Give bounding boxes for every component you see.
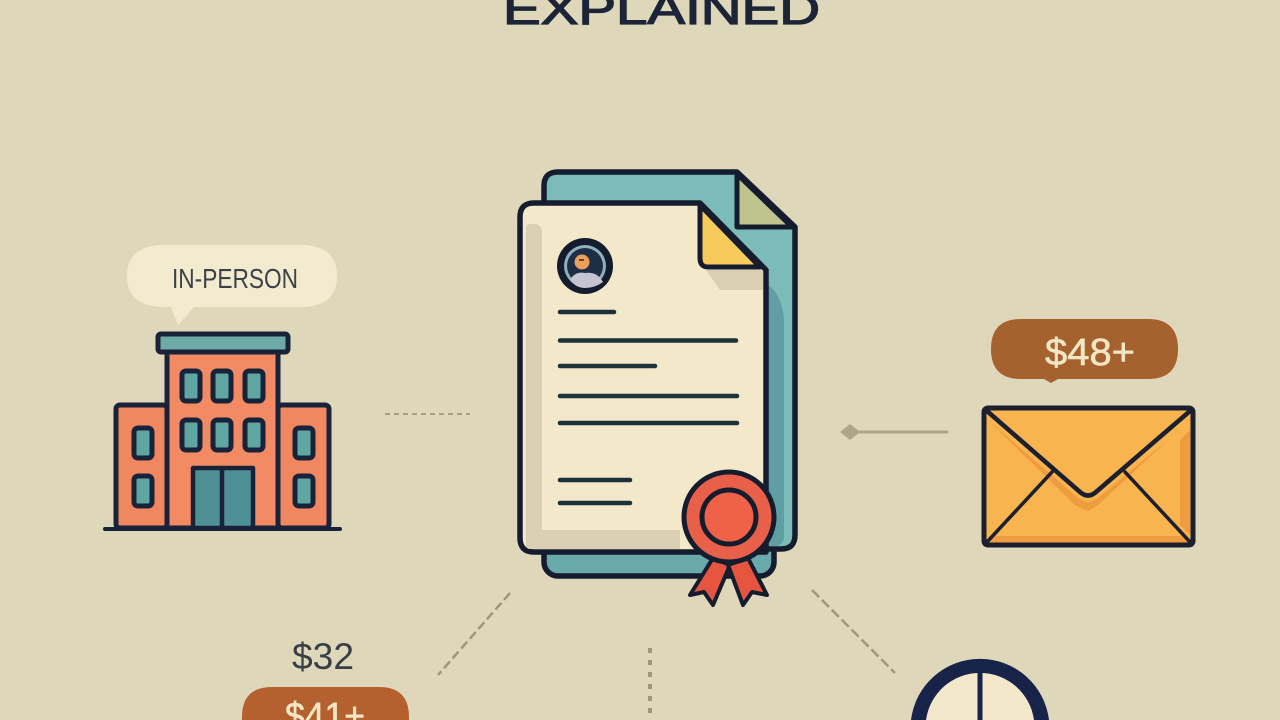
callout: in-person: IN-PERSON xyxy=(172,263,298,294)
price pill: $48+: $48+ xyxy=(1045,332,1135,374)
building xyxy=(105,334,340,529)
connector: lower right dashed xyxy=(812,590,895,673)
price pill: $48+ xyxy=(991,319,1178,383)
envelope xyxy=(984,408,1193,545)
front sheet xyxy=(520,203,766,552)
price pill: $41+ xyxy=(242,687,409,720)
avatar xyxy=(557,238,613,294)
icon: certified document xyxy=(520,172,795,605)
shadow on back sheet xyxy=(768,285,784,546)
callout: in-person xyxy=(127,245,337,325)
connector: lower left dashed xyxy=(438,593,510,675)
folded corner xyxy=(700,205,760,267)
paper shadows xyxy=(526,224,763,549)
icon: clock xyxy=(911,659,1049,720)
icon: mail with price xyxy=(984,319,1193,545)
connector: lower centre dotted xyxy=(648,648,652,719)
icon: in-person building with label xyxy=(105,245,340,529)
connector: mail to document xyxy=(840,424,947,440)
price: $32: $32 xyxy=(292,636,354,677)
back sheet xyxy=(544,172,795,576)
connector: in-person to document xyxy=(385,413,470,415)
ribbon seal xyxy=(684,472,774,605)
text lines xyxy=(560,312,737,503)
